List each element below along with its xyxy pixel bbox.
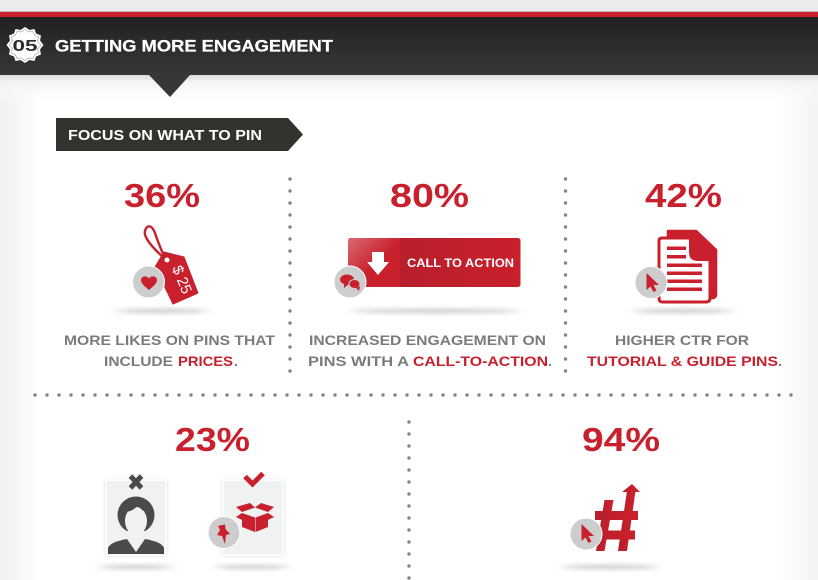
description: CALL-TO-ACTION [413, 353, 548, 369]
panel: guide pins stat [587, 178, 782, 369]
stat value: 42% [645, 178, 722, 215]
icon: number badge: 05 [12, 38, 38, 55]
description: INCREASED ENGAGEMENT ON [309, 332, 546, 348]
header band [0, 11, 818, 97]
description: . [234, 353, 238, 369]
title: GETTING MORE ENGAGEMENT [55, 36, 334, 56]
panel: prices stat [64, 178, 275, 369]
description: . [778, 353, 782, 369]
section ribbon: FOCUS ON WHAT TO PIN [68, 128, 262, 144]
description: PRICES [178, 353, 233, 369]
icon: document [633, 231, 733, 314]
panel: call to action stat [308, 178, 552, 369]
dividers [35, 179, 795, 580]
description: INCLUDE [104, 353, 173, 369]
description: TUTORIAL & GUIDE PINS [587, 353, 778, 369]
description: MORE LIKES ON PINS THAT [64, 332, 275, 348]
description: PINS WITH A [308, 353, 409, 369]
description: . [548, 353, 552, 369]
icon: hashtag with arrow [562, 484, 658, 570]
stat value: 80% [390, 178, 469, 215]
icon: call to action button [334, 238, 520, 314]
icon: product card checked [208, 474, 288, 570]
stat value: 23% [175, 422, 250, 459]
icon: price tag [116, 226, 208, 314]
section ribbon [56, 118, 303, 151]
description [308, 332, 552, 369]
icon: person card crossed [100, 476, 172, 570]
panel: hashtag stat [562, 422, 660, 570]
icon: call to action button: CALL TO ACTION [407, 258, 514, 270]
panel: no faces stat [100, 422, 288, 570]
icon: price tag: $ 25 [168, 263, 195, 296]
stat value: 36% [124, 178, 200, 215]
description: HIGHER CTR FOR [615, 332, 749, 348]
description [64, 332, 275, 369]
description [587, 332, 782, 369]
icon: number badge [6, 27, 44, 63]
stat value: 94% [582, 422, 660, 459]
